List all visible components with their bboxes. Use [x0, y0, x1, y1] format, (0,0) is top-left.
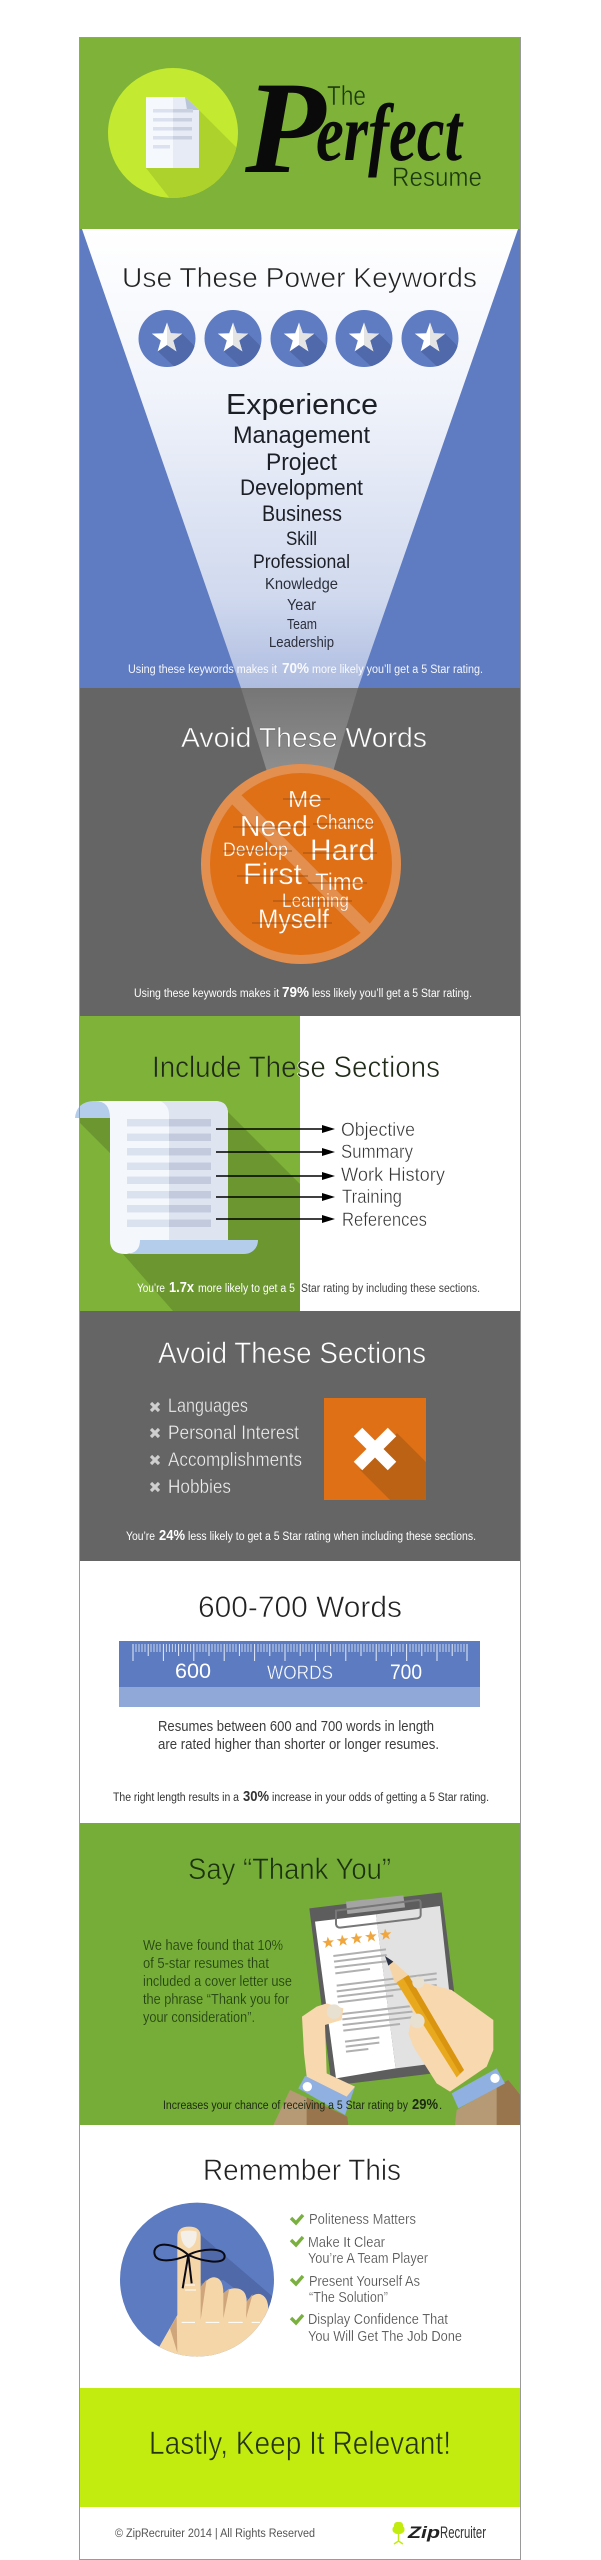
keyword list — [226, 389, 378, 651]
section names list: Work History — [341, 1165, 445, 1186]
stat: 1.7x: 1.7x — [169, 1280, 194, 1296]
icon: orange X square — [324, 1398, 426, 1500]
checklist: You Will Get The Job Done — [308, 2328, 462, 2345]
section names list: Objective — [341, 1120, 415, 1141]
icon: five stars — [138, 310, 458, 367]
panel: remember this — [120, 2158, 462, 2357]
logo: ZipRecruiter: Zip — [407, 2523, 440, 2542]
stat: 70%: Using these keywords makes it — [128, 664, 278, 676]
panel: keep it relevant — [80, 2388, 520, 2507]
stat: 79%: less likely you’ll get a 5 Star rating. — [312, 988, 472, 1000]
icon: prohibited words circle: Develop — [223, 840, 288, 861]
heading: lastly keep it relevant: Lastly, Keep It Relevant! — [149, 2425, 451, 2461]
copyright: © ZipRecruiter 2014 | All Rights Reserved — [115, 2528, 315, 2540]
checklist: You’re A Team Player — [308, 2250, 428, 2267]
heading: remember this: Remember This — [203, 2154, 401, 2187]
title: The Perfect Resume: erfect — [316, 87, 464, 178]
heading: say thank you: Say “Thank You” — [188, 1853, 391, 1886]
text: word length explanation: are rated higher than shorter or longer resumes. — [158, 1736, 439, 1753]
icon: string tied on finger — [120, 2203, 277, 2360]
logo: ZipRecruiter — [392, 2522, 486, 2544]
title: The Perfect Resume: The — [327, 80, 366, 111]
logo: ZipRecruiter: Recruiter — [440, 2523, 486, 2542]
text: thank you finding: your consideration”. — [143, 2009, 255, 2026]
stat: 1.7x — [137, 1280, 480, 1296]
stat: 30%: 30% — [243, 1789, 269, 1805]
stat: 70%: more likely you’ll get a 5 Star rating. — [312, 664, 483, 676]
panel: 600-700 words — [80, 1561, 520, 1823]
heading: include these sections: Include The — [152, 1051, 297, 1084]
stat: 24%: 24% — [159, 1528, 185, 1544]
stat: 30% — [113, 1789, 489, 1805]
stat: 29%: . — [439, 2100, 442, 2112]
ruler graphic: 600 — [175, 1660, 211, 1683]
text: thank you finding: included a cover letter use — [143, 1973, 292, 1990]
checklist: “The Solution” — [309, 2289, 388, 2306]
keyword list: Experience — [226, 389, 378, 421]
panel: footer — [80, 2507, 520, 2559]
heading: avoid these sections: Avoid These Sections — [158, 1337, 426, 1370]
text: word length explanation: Resumes between 600 and 700 words in length — [158, 1718, 434, 1735]
icon: prohibited words circle: First — [243, 858, 303, 891]
list: sections to avoid: Languages — [168, 1395, 248, 1417]
icon: prohibited words circle: Time — [315, 869, 364, 896]
arrows to section names — [216, 1125, 335, 1223]
icon: prohibited words circle: Me — [288, 786, 322, 812]
checklist: Make It Clear — [308, 2234, 385, 2251]
checklist: Politeness Matters — [309, 2211, 416, 2228]
stat: 24% — [126, 1528, 476, 1544]
panel: avoid these words — [80, 688, 520, 1016]
icon: prohibited words circle: Need — [240, 811, 308, 843]
stat: 1.7x: You’re — [137, 1283, 165, 1295]
stat: 24%: You’re — [126, 1531, 155, 1543]
stat: 29%: Increases your chance of receiving a 5 Star rating by — [163, 2100, 408, 2112]
ruler graphic: WORDS — [267, 1663, 333, 1684]
icon: prohibited words circle — [201, 764, 401, 964]
section names list: Training — [342, 1187, 402, 1208]
heading: 600-700 words: 600-700 Words — [198, 1591, 402, 1624]
page frame — [80, 38, 520, 2560]
keyword list: Development — [240, 475, 363, 500]
panel: power keywords — [80, 229, 520, 688]
keyword list: Skill — [286, 529, 317, 550]
panel: avoid these sections — [80, 1311, 520, 1561]
ruler graphic: 700 — [390, 1661, 422, 1684]
checklist: Present Yourself As — [309, 2273, 420, 2290]
stat: 79%: 79% — [282, 985, 309, 1001]
list: sections to avoid: Hobbies — [168, 1476, 231, 1498]
icon: prohibited words circle: Myself — [258, 904, 329, 934]
section names list: References — [342, 1210, 427, 1231]
illustration: hands writing on clipboard — [273, 1892, 520, 2125]
heading: avoid these words: Avoid These Words — [181, 722, 427, 753]
text: thank you finding: the phrase “Thank you for — [143, 1991, 289, 2008]
icon: document in lime circle — [108, 68, 238, 198]
list: sections to avoid — [151, 1395, 302, 1498]
text: thank you finding — [143, 1937, 292, 2026]
list: sections to avoid: Personal Interest — [168, 1422, 300, 1444]
checklist — [291, 2211, 462, 2345]
text: thank you finding: We have found that 10% — [143, 1937, 283, 1954]
title: The Perfect Resume — [244, 54, 482, 201]
icon: prohibited words circle: Hard — [310, 834, 375, 867]
panel: header — [80, 38, 520, 229]
stat: 30%: increase in your odds of getting a 5 Star rating. — [272, 1792, 489, 1804]
title: The Perfect Resume: P — [244, 54, 327, 201]
heading: power keywords: Use These Power Keywords — [122, 262, 477, 293]
ruler graphic — [119, 1641, 480, 1707]
stat: 24%: less likely to get a 5 Star rating when including these sections. — [188, 1531, 476, 1543]
icon: prohibited words circle: Learning — [282, 891, 349, 912]
checklist: Display Confidence That — [308, 2311, 449, 2328]
panel: include these sections — [75, 1016, 520, 1311]
text: word length explanation — [158, 1718, 439, 1753]
panel: say thank you — [80, 1823, 520, 2125]
keyword list: Project — [266, 449, 337, 476]
keyword list: Business — [262, 501, 342, 526]
stat: 70% — [128, 661, 483, 677]
stat: 1.7x: more likely to get a 5 — [198, 1283, 295, 1295]
section names list: Summary — [341, 1142, 413, 1163]
stat: 79%: Using these keywords makes it — [134, 988, 280, 1000]
keyword list: Year — [287, 597, 317, 614]
heading: include these sections: se Sections — [297, 1051, 440, 1084]
icon: prohibited words circle: Chance — [316, 812, 374, 834]
title: The Perfect Resume: Resume — [392, 162, 482, 192]
stat: 1.7x: Star rating by including these sections. — [301, 1283, 480, 1295]
text: thank you finding: of 5-star resumes that — [143, 1955, 270, 1972]
keyword list: Team — [287, 617, 317, 633]
stat: 29%: 29% — [412, 2097, 438, 2113]
keyword list: Leadership — [269, 635, 334, 651]
keyword list: Professional — [253, 552, 350, 573]
list: sections to avoid: Accomplishments — [168, 1449, 302, 1471]
section names list — [341, 1120, 445, 1231]
keyword list: Management — [233, 422, 370, 449]
keyword list: Knowledge — [265, 576, 338, 593]
stat: 70%: 70% — [282, 661, 309, 677]
stat: 30%: The right length results in a — [113, 1792, 240, 1804]
icon: resume scroll — [75, 1101, 258, 1254]
stat: 79% — [134, 985, 472, 1001]
